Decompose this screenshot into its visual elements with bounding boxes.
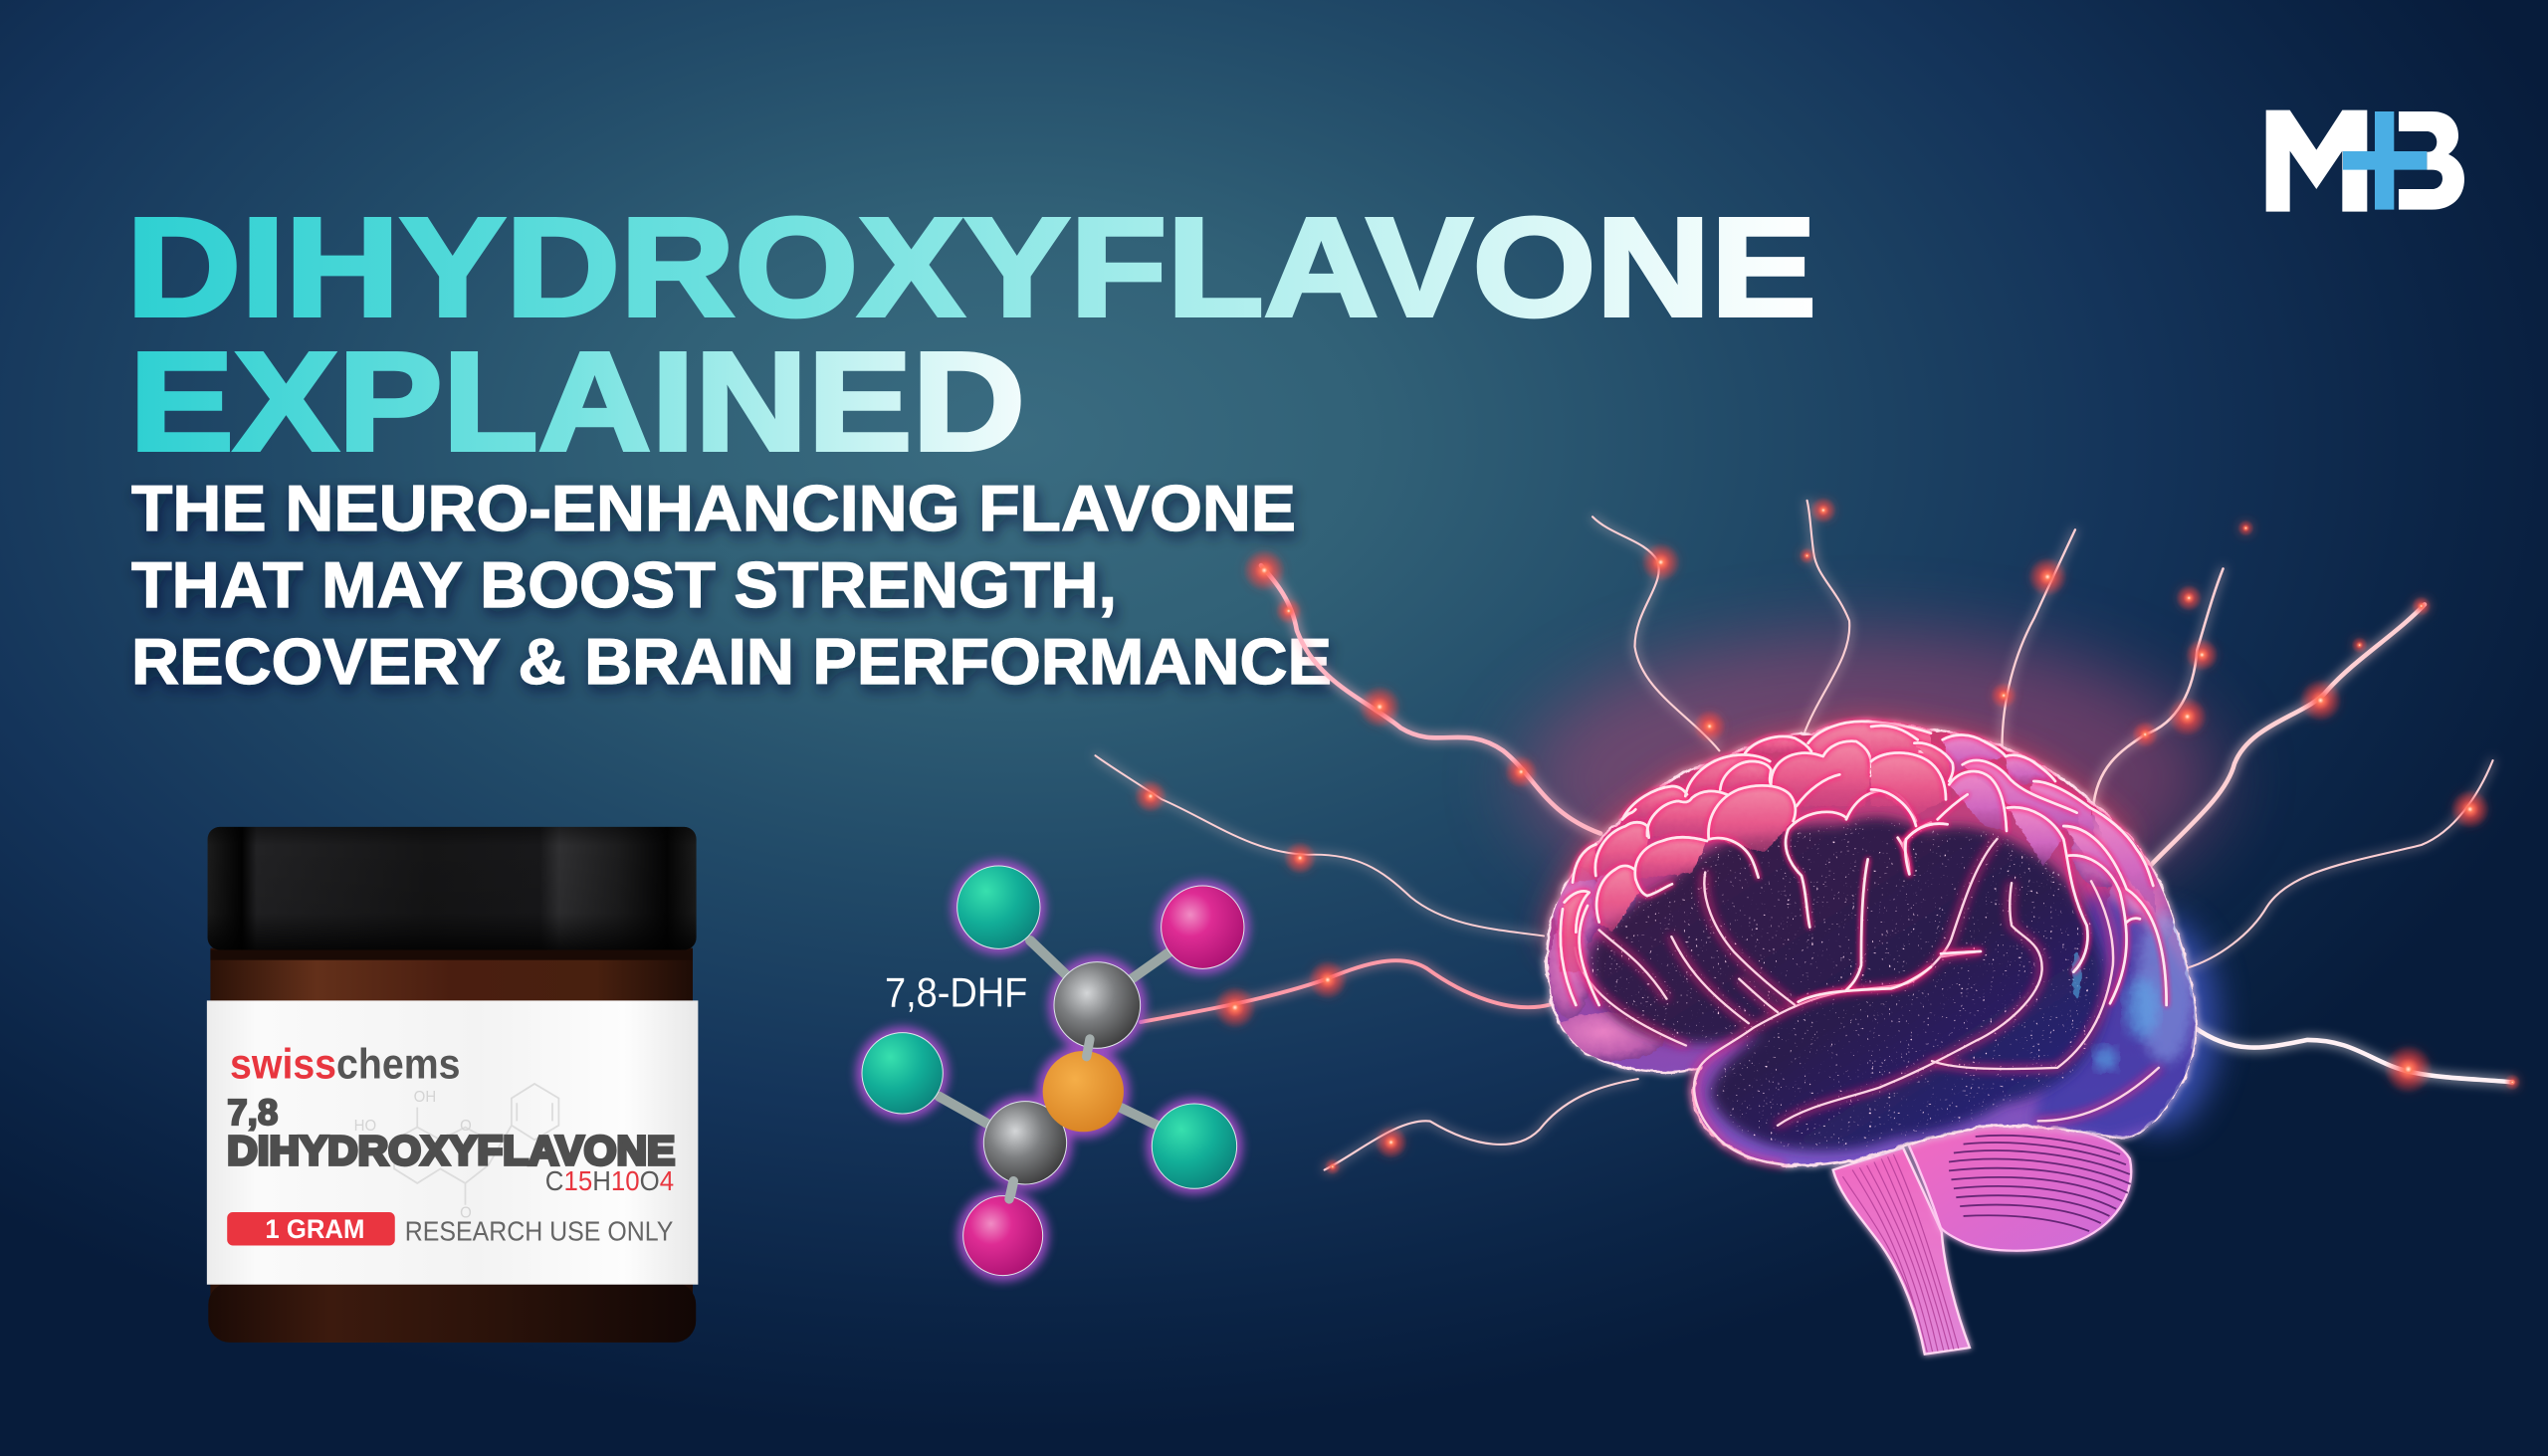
glowing lower sulci: [1575, 839, 2159, 1164]
logo: M+B: [2266, 110, 2464, 212]
atoms: [862, 866, 1244, 1276]
product name: 7,8: [227, 1092, 278, 1133]
gyri lines left: [1561, 722, 1931, 1005]
product jar: [207, 827, 698, 1343]
brain: [1547, 722, 2198, 1354]
title: [126, 188, 1816, 480]
research note: RESEARCH USE ONLY: [405, 1215, 673, 1246]
jar label: [207, 1000, 698, 1285]
dark cortex: [1589, 817, 2106, 1150]
subtitle: THAT MAY BOOST STRENGTH,: [131, 548, 1117, 621]
upper right gyri: [1871, 726, 2167, 1005]
blue highlights: [2072, 913, 2196, 1071]
brain stem: [1833, 1147, 1970, 1354]
product jar: O: [460, 1204, 472, 1222]
jar lid: [208, 827, 697, 949]
title: EXPLAINED: [129, 322, 1025, 480]
nerve fibres: [1095, 498, 2520, 1174]
right lobe tint: [2033, 890, 2198, 1139]
cerebrum: [1547, 723, 2198, 1165]
subtitle: RECOVERY & BRAIN PERFORMANCE: [131, 625, 1332, 698]
molecule 7,8-DHF: [856, 860, 1250, 1282]
bond overlap: [1009, 1039, 1090, 1199]
brain halo: [1522, 632, 2217, 1130]
brand name: swisschems: [230, 1040, 460, 1088]
size badge: 1 GRAM: [265, 1214, 364, 1244]
frontal and occipital folds: [1549, 812, 2173, 1061]
title: DIHYDROXYFLAVONE: [126, 188, 1816, 345]
product jar: OH: [414, 1089, 436, 1106]
molecule label: 7,8-DHF: [885, 969, 1027, 1016]
bonds: [939, 940, 1176, 1201]
product name: DIHYDROXYFLAVONE: [227, 1128, 675, 1173]
cortex speckle: [1589, 817, 2106, 1150]
gyri lines right: [1871, 726, 2167, 1005]
subtitle: THE NEURO-ENHANCING FLAVONE: [131, 472, 1296, 544]
cerebellum: [1908, 1125, 2131, 1251]
gyri fills left: [1560, 722, 1931, 972]
size badge: [227, 1212, 395, 1245]
formula: C15H10O4: [545, 1165, 674, 1196]
atom aura: [856, 860, 1250, 1282]
product jar: O: [460, 1118, 472, 1135]
label structure watermark: [394, 1084, 558, 1205]
jar glass: [208, 948, 696, 1343]
subtitle: [131, 472, 1332, 698]
gyri fills right: [1871, 726, 2157, 913]
product jar: HO: [354, 1118, 376, 1135]
neural sparks: [1135, 498, 2520, 1174]
product name: [227, 1092, 675, 1173]
brain lower structures and cortex: [1547, 723, 2198, 1354]
upper left gyri: [1560, 722, 1931, 1005]
